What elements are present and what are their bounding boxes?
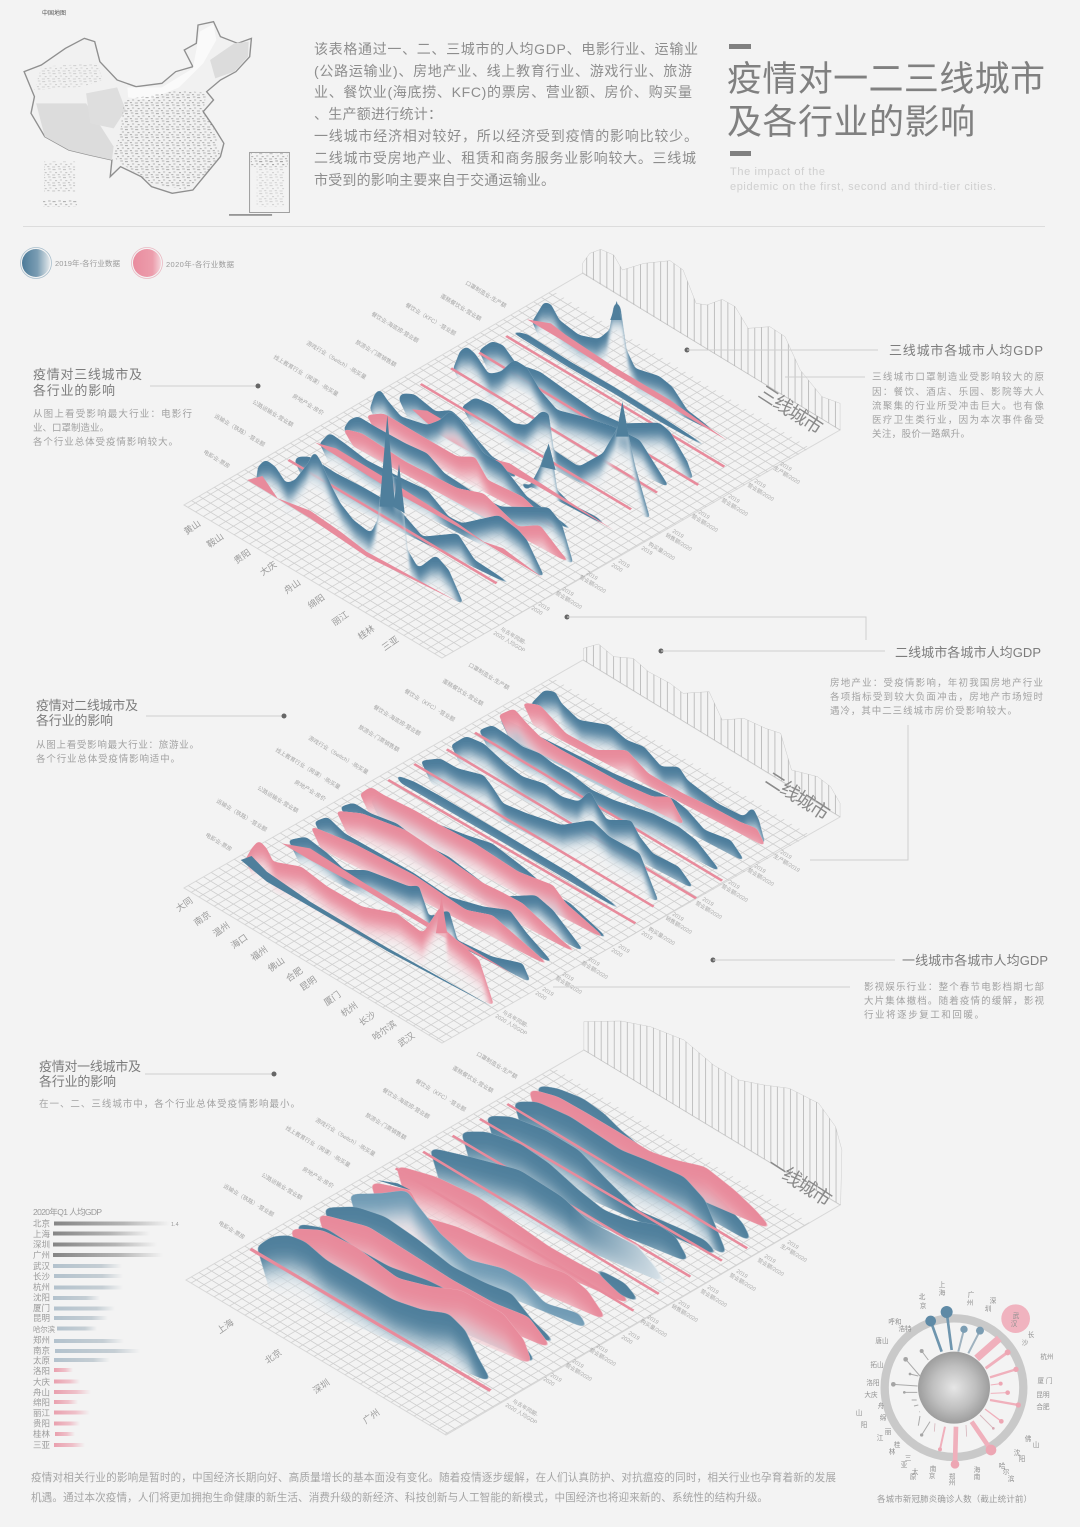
- city labels: 桂林: [355, 622, 377, 642]
- radial chart: confirmed cases by city: 合肥: [1036, 1402, 1050, 1411]
- radial chart: confirmed cases by city: 长: [1028, 1330, 1035, 1339]
- chart: first-tier cities: [186, 1021, 842, 1435]
- year labels: 2019: [617, 559, 630, 570]
- hatched wall: per-capita GDP: [582, 249, 840, 430]
- callout: first-tier right: [553, 953, 1048, 1021]
- year labels: 2020: [542, 1377, 555, 1388]
- city labels: 哈尔滨: [370, 1018, 398, 1042]
- callout: third-tier left: [33, 367, 260, 448]
- industry labels: 旅游业-门票销售额: [357, 723, 401, 754]
- radial chart: confirmed cases by city: 南: [930, 1464, 937, 1473]
- year labels: 与去年同期-: [499, 625, 528, 647]
- year labels: 2019: [537, 602, 550, 613]
- callout: third-tier right: 关注，股价一路飙升。: [872, 428, 970, 440]
- callout: second-tier left: [36, 698, 286, 765]
- radial chart: confirmed cases by city: 洛阳: [866, 1378, 880, 1387]
- year labels: 2019: [727, 880, 740, 891]
- year labels: 营业额/2020: [728, 1271, 757, 1293]
- year labels: 2019: [640, 931, 653, 942]
- year labels: [504, 1238, 811, 1426]
- callout: third-tier right: [684, 343, 1044, 440]
- industry labels: 餐饮业-海底捞-营业额: [372, 703, 423, 738]
- callout: second-tier right: 房地产业：受疫情影响，年初我国房地产行业: [830, 677, 1043, 689]
- radial chart: confirmed cases by city: 上: [939, 1280, 946, 1289]
- bar chart: 2020 Q1 per-capita GDP: 长沙: [33, 1272, 51, 1282]
- year labels: 营业额/2020: [746, 481, 775, 503]
- bar chart: 2020 Q1 per-capita GDP: 2020年Q1 人均GDP: [33, 1207, 102, 1217]
- industry labels: [204, 661, 511, 853]
- ridges: rear to front: [247, 300, 727, 605]
- radial chart: confirmed cases by city: 山: [1033, 1440, 1039, 1449]
- radial chart: confirmed cases by city: 阳: [1019, 1454, 1025, 1463]
- closing text: [31, 1471, 836, 1504]
- city labels: 上海: [214, 1316, 236, 1336]
- intro paragraph: 业、餐饮业(海底捞、KFC)的票房、营业额、房价、购买量: [314, 84, 692, 100]
- year labels: 2019: [585, 571, 598, 582]
- year labels: 营业额/2020: [564, 1361, 593, 1383]
- year labels: 营业额/2020: [746, 866, 775, 888]
- year labels: 2019: [735, 1269, 748, 1280]
- year labels: 2019: [786, 1240, 799, 1251]
- city labels: 深圳: [311, 1377, 332, 1396]
- year labels: 2020: [534, 991, 547, 1002]
- wall title: 三线城市: [754, 382, 827, 439]
- year labels: 营业额/2020: [554, 589, 583, 611]
- radial chart: confirmed cases by city: 尔: [1003, 1467, 1010, 1476]
- city labels: 大同: [173, 894, 195, 914]
- industry labels: 电影业-票房: [204, 831, 234, 853]
- bar chart: 2020 Q1 per-capita GDP: 武汉: [33, 1261, 51, 1271]
- year labels: 销售额/2020: [664, 914, 693, 936]
- year labels: 2019: [727, 494, 740, 505]
- radial chart: confirmed cases by city: 圳: [985, 1304, 992, 1313]
- callout: third-tier left: 各个行业总体受疫情影响较大。: [33, 436, 178, 448]
- industry labels: 游戏行业（Switch）-购买量: [314, 1116, 377, 1158]
- year labels: 2019: [753, 864, 766, 875]
- ridges: rear to front: [251, 1085, 775, 1391]
- callout: third-tier left: 各行业的影响: [33, 383, 115, 398]
- city labels: 丽江: [330, 609, 351, 628]
- callout: third-tier right: 三线城市口罩制造业受影响较大的原: [872, 371, 1044, 383]
- radial chart: confirmed cases by city: 三: [905, 1454, 912, 1462]
- year labels: 营业额/2020: [756, 1256, 785, 1278]
- radial chart: confirmed cases by city: 深: [990, 1296, 997, 1305]
- city labels: 绵阳: [305, 591, 327, 611]
- year labels: 营业额/2020: [699, 1287, 728, 1309]
- radial chart: confirmed cases by city: 唐山: [875, 1336, 889, 1345]
- radial chart: confirmed cases by city: 沙: [1022, 1339, 1029, 1347]
- bar chart: 2020 Q1 per-capita GDP: 1.4: [171, 1222, 179, 1228]
- industry labels: 房地产业-房价: [301, 1165, 336, 1190]
- callout: third-tier right: 三线城市各城市人均GDP: [889, 343, 1043, 358]
- radial chart: confirmed cases by city: 京: [929, 1471, 936, 1480]
- radial chart: confirmed cases by city: 佛: [1025, 1434, 1032, 1443]
- radial chart: confirmed cases by city: 海: [939, 1288, 946, 1297]
- city labels: 广州: [360, 1406, 382, 1426]
- intro paragraph: 市受到的影响主要来自于交通运输业。: [314, 172, 555, 188]
- bar chart: 2020 Q1 per-capita GDP: 杭州: [33, 1282, 50, 1292]
- legend: 2020年-各行业数据: [166, 259, 234, 269]
- year labels: 营业额/2020: [720, 496, 749, 518]
- bar chart: 2020 Q1 per-capita GDP: [33, 1207, 179, 1450]
- city labels: 武汉: [395, 1029, 417, 1049]
- city labels: [214, 1316, 382, 1426]
- industry labels: 线上教育行业（网课）-购买量: [274, 746, 342, 791]
- city labels: 黄山: [181, 517, 203, 537]
- title: epidemic on the first, second and third-tier cities.: [730, 181, 996, 193]
- year labels: 营业额/2020: [588, 1346, 617, 1368]
- radial chart: confirmed cases by city: 京: [920, 1301, 927, 1310]
- bar chart: 2020 Q1 per-capita GDP: 厦门: [33, 1303, 50, 1313]
- year labels: 2019: [595, 1344, 608, 1355]
- year labels: 营业额/2020: [578, 573, 607, 595]
- year labels: 2020 人均GDP: [494, 1012, 529, 1037]
- radial chart: confirmed cases by city: 州: [967, 1300, 973, 1307]
- city labels: 长沙: [356, 1008, 378, 1028]
- industry labels: 蛋糕餐饮业-营业额: [451, 1064, 495, 1095]
- industry labels: 游戏行业（Switch）-购买量: [307, 734, 370, 776]
- radial chart: confirmed cases by city: 各城市新冠肺炎确诊人数（截止统计前）: [877, 1494, 1032, 1504]
- year labels: 2019: [753, 479, 766, 490]
- radial chart: confirmed cases by city: 滨: [1008, 1474, 1015, 1483]
- radial chart: confirmed cases by city: 桂: [894, 1440, 901, 1449]
- city labels: 鞍山: [204, 530, 226, 550]
- radial chart: confirmed cases by city: 拓山: [870, 1360, 884, 1369]
- industry labels: 餐饮业-海底捞-营业额: [370, 310, 421, 345]
- year labels: 购买量/2020: [647, 540, 677, 562]
- callout: second-tier left: 从图上看受影响最大行业：旅游业。: [36, 739, 199, 751]
- industry labels: 餐饮业（KFC）-营业额: [414, 1077, 468, 1114]
- radial chart: confirmed cases by city: 丽: [885, 1428, 892, 1436]
- radial chart: confirmed cases by city: 亚: [901, 1461, 908, 1469]
- year labels: 2019: [706, 1285, 719, 1296]
- radial chart: confirmed cases by city: 郑: [949, 1473, 956, 1481]
- year labels: 2019: [697, 510, 710, 521]
- year labels: 2019: [571, 1359, 584, 1370]
- bar chart: 2020 Q1 per-capita GDP: 桂林: [33, 1429, 51, 1439]
- wall title: 一线城市: [763, 1154, 836, 1211]
- closing text: 机遇。通过本次疫情，人们将更加拥抱生命健康的新生活、消费升级的新经济、科技创新与人工智能的新模式，中国经济也将迎来新的、系统性的结构升级。: [31, 1491, 768, 1504]
- industry labels: [202, 279, 508, 470]
- intro paragraph: (公路运输业)、房地产业、线上教育行业、游戏行业、旅游: [314, 63, 692, 79]
- radial chart: confirmed cases by city: 州: [949, 1480, 955, 1487]
- bar chart: 2020 Q1 per-capita GDP: 沈阳: [33, 1292, 50, 1302]
- intro paragraph: [314, 41, 698, 188]
- callout: third-tier left: 业、口罩制造业。: [33, 422, 109, 434]
- radial chart: confirmed cases by city: 江: [877, 1434, 884, 1442]
- radial chart: confirmed cases by city: 绵: [880, 1413, 887, 1422]
- year labels: 2019: [627, 1331, 640, 1342]
- year labels: 2020 人均GDP: [492, 629, 527, 654]
- city labels: 南京: [191, 908, 213, 928]
- callout: third-tier right: 因：餐饮、酒店、乐园、影院等大人: [872, 386, 1044, 398]
- year labels: 营业额/2020: [694, 899, 723, 921]
- year labels: 2019: [646, 1315, 659, 1326]
- callout: third-tier left: 疫情对三线城市及: [33, 367, 142, 382]
- year labels: 2019: [779, 850, 792, 861]
- industry labels: 餐饮业（KFC）-营业额: [404, 301, 458, 338]
- year labels: 生产额/2020: [779, 1242, 808, 1264]
- city labels: 厦门: [321, 988, 343, 1008]
- bar chart: 2020 Q1 per-capita GDP: 太原: [33, 1356, 50, 1366]
- callout: second-tier left: 各个行业总体受疫情影响适中。: [36, 753, 180, 765]
- industry labels: 公路运输业-营业额: [256, 784, 300, 815]
- industry labels: 蛋糕餐饮业-营业额: [441, 677, 485, 708]
- year labels: 2020: [530, 606, 543, 617]
- year labels: 2019: [763, 1254, 776, 1265]
- city labels: 福州: [248, 943, 270, 963]
- bar chart: 2020 Q1 per-capita GDP: 深圳: [33, 1240, 50, 1250]
- city labels: [181, 517, 401, 653]
- year labels: 2019: [671, 529, 684, 540]
- industry labels: 线上教育行业（网课）-购买量: [284, 1124, 352, 1169]
- callout: second-tier left: 疫情对二线城市及: [36, 698, 138, 713]
- radial chart: confirmed cases by city: 舟: [878, 1401, 885, 1410]
- bar chart: 2020 Q1 per-capita GDP: 南京: [33, 1346, 50, 1356]
- industry labels: 蛋糕餐饮业-营业额: [439, 292, 483, 323]
- city labels: 杭州: [338, 999, 360, 1019]
- industry labels: 房地产业-房价: [291, 392, 326, 417]
- intro paragraph: 二线城市受房地产业、租赁和商务服务业影响较大。三线城: [314, 150, 696, 166]
- callout: second-tier right: 遇冷，其中二三线城市房价受影响较大。: [830, 705, 1017, 717]
- hatched wall: per-capita GDP: [584, 1021, 842, 1205]
- city labels: 三亚: [380, 634, 401, 653]
- bar chart: 2020 Q1 per-capita GDP: 上海: [33, 1229, 51, 1239]
- callout: first-tier left: 在一、二、三线城市中，各个行业总体受疫情影响最小。: [39, 1098, 300, 1110]
- year labels: 2019: [677, 1300, 690, 1311]
- industry labels: 游戏行业（Switch）-购买量: [305, 339, 368, 381]
- callout: second-tier right: [564, 614, 1043, 860]
- grid floor: [186, 1050, 840, 1435]
- city labels: 温州: [211, 920, 232, 939]
- radial chart: confirmed cases by city: 沈: [1014, 1448, 1021, 1457]
- intro paragraph: 一线城市经济相对较好，所以经济受到疫情的影响比较少。: [314, 128, 698, 144]
- bar chart: 2020 Q1 per-capita GDP: 郑州: [33, 1335, 50, 1345]
- radial chart: confirmed cases by city: 浩特: [898, 1324, 912, 1333]
- bar chart: 2020 Q1 per-capita GDP: 舟山: [33, 1388, 50, 1398]
- bar chart: 2020 Q1 per-capita GDP: 洛阳: [33, 1366, 50, 1376]
- radial chart: confirmed cases by city: 山: [856, 1408, 862, 1417]
- radial chart: confirmed cases by city: 杭州: [1040, 1352, 1054, 1361]
- year labels: 2019: [549, 1373, 562, 1384]
- bar chart: 2020 Q1 per-capita GDP: 大庆: [33, 1377, 51, 1387]
- radial chart: confirmed cases by city: 原: [910, 1473, 917, 1481]
- year labels: 2019: [671, 912, 684, 923]
- radial chart: confirmed cases by city: 哈: [999, 1461, 1006, 1470]
- radial chart: confirmed cases by city: 南: [974, 1472, 981, 1481]
- callout: first-tier right: 影视娱乐行业：整个春节电影档期七部: [864, 981, 1044, 993]
- year labels: 营业额/2020: [690, 512, 719, 534]
- year labels: 2019: [561, 972, 574, 983]
- year labels: 2019: [701, 897, 714, 908]
- year labels: 购买量/2020: [639, 1317, 668, 1339]
- radial chart: confirmed cases by city: 武: [1013, 1311, 1020, 1320]
- year labels: 2019: [640, 546, 653, 557]
- callout: third-tier left: 从图上看受影响最大行业：电影行: [33, 408, 192, 420]
- radial chart: confirmed cases by city: 汉: [1011, 1320, 1018, 1328]
- year labels: [492, 460, 804, 654]
- industry labels: 运输业（铁路）-营业额: [213, 412, 267, 449]
- industry labels: 公路运输业-营业额: [251, 398, 295, 429]
- industry labels: 线上教育行业（网课）-购买量: [272, 353, 340, 398]
- legend: [20, 248, 234, 278]
- bar chart: 2020 Q1 per-capita GDP: 广州: [33, 1250, 50, 1260]
- year labels: 2020: [620, 1335, 633, 1346]
- city labels: 贵阳: [231, 546, 253, 566]
- chart: second-tier cities: [173, 644, 840, 1049]
- chart: third-tier cities: [181, 249, 840, 658]
- title: [727, 44, 1045, 193]
- year labels: 购买量/2020: [647, 925, 677, 947]
- year labels: 2020: [610, 563, 623, 574]
- industry labels: 餐饮业（KFC）-营业额: [403, 687, 457, 724]
- city labels: 昆明: [298, 974, 319, 993]
- radial chart: confirmed cases by city: 北: [919, 1293, 926, 1301]
- industry labels: 旅游业-门票销售额: [354, 338, 398, 369]
- city labels: 大庆: [257, 558, 279, 578]
- year labels: 销售额/2020: [664, 531, 693, 553]
- year labels: 与去年同期-: [501, 1008, 530, 1030]
- industry labels: 餐饮业-海底捞-营业额: [381, 1086, 432, 1121]
- industry labels: 电影业-票房: [202, 448, 232, 470]
- year labels: 生产额/2019: [772, 852, 801, 874]
- industry labels: 口罩制造业-生产额: [475, 1050, 519, 1081]
- callout: first-tier right: 一线城市各城市人均GDP: [902, 953, 1048, 968]
- title: 及各行业的影响: [727, 103, 975, 142]
- bar chart: 2020 Q1 per-capita GDP: 哈尔滨: [33, 1324, 56, 1334]
- radial chart: confirmed cases by city: 阳: [861, 1420, 867, 1429]
- industry labels: 房地产业-房价: [293, 778, 328, 803]
- year labels: 营业额/2020: [720, 882, 749, 904]
- callout: second-tier right: 各项指标受到较大负面冲击，房地产市场短时: [830, 691, 1043, 703]
- callout: third-tier right: 医疗卫生类行业，因为本次事件备受: [872, 414, 1044, 426]
- radial chart: confirmed cases by city: 广: [968, 1290, 975, 1299]
- bar chart: 2020 Q1 per-capita GDP: 三亚: [33, 1440, 51, 1450]
- year labels: 2019: [561, 587, 574, 598]
- radial chart: confirmed cases by city: 林: [889, 1447, 896, 1456]
- callout: first-tier left: 各行业的影响: [39, 1074, 116, 1089]
- bar chart: 2020 Q1 per-capita GDP: 昆明: [33, 1313, 50, 1323]
- legend: 2019年-各行业数据: [55, 258, 120, 268]
- year labels: 营业额/2020: [554, 974, 583, 996]
- map of China: 中国地图: [42, 9, 66, 17]
- year labels: 销售额/2020: [670, 1302, 699, 1324]
- callout: second-tier left: 各行业的影响: [36, 713, 113, 728]
- city labels: 海口: [228, 931, 250, 951]
- year labels: 2020: [610, 948, 623, 959]
- callout: first-tier right: 大片集体撤档。随着疫情的缓解，影视: [864, 995, 1044, 1007]
- callout: first-tier left: 疫情对一线城市及: [39, 1059, 141, 1074]
- year labels: 2020 人均GDP: [504, 1401, 539, 1426]
- year labels: 2019: [541, 987, 554, 998]
- callout: first-tier left: [39, 1059, 300, 1110]
- callout: second-tier right: 二线城市各城市人均GDP: [895, 645, 1041, 660]
- map of China: [24, 9, 289, 215]
- intro paragraph: 、生产额进行统计：: [314, 106, 442, 122]
- ridges: rear to front: [241, 690, 766, 1007]
- industry labels: 运输业（铁路）-营业额: [222, 1182, 276, 1219]
- radial chart: confirmed cases by city: [856, 1280, 1054, 1504]
- city labels: 北京: [262, 1346, 284, 1366]
- year labels: 2019: [779, 462, 792, 473]
- year labels: 2019: [587, 957, 600, 968]
- industry labels: 公路运输业-营业额: [260, 1171, 304, 1202]
- callout: third-tier right: 流聚集的行业所受冲击巨大。也有像: [872, 400, 1044, 412]
- year labels: 营业额/2020: [580, 959, 609, 981]
- wall title: 二线城市: [761, 768, 834, 825]
- bar chart: 2020 Q1 per-capita GDP: 北京: [33, 1218, 50, 1228]
- year labels: 2019: [617, 944, 630, 955]
- closing text: 疫情对相关行业的影响是暂时的，中国经济长期向好、高质量增长的基本面没有变化。随着疫情逐步缓解，在人们认真防护、对抗瘟疫的同时，相关行业也孕育着新的发展: [31, 1471, 836, 1484]
- city labels: 合肥: [283, 964, 305, 984]
- hatched wall: per-capita GDP: [583, 644, 840, 817]
- industry labels: 口罩制造业-生产额: [467, 661, 511, 692]
- radial chart: confirmed cases by city: 厦 门: [1037, 1376, 1053, 1385]
- radial chart: confirmed cases by city: 太: [912, 1467, 919, 1476]
- radial chart: confirmed cases by city: 大庆: [864, 1390, 878, 1399]
- radial chart: confirmed cases by city: 呼和: [888, 1317, 902, 1326]
- title: The impact of the: [730, 166, 825, 178]
- industry labels: [217, 1050, 519, 1241]
- radial chart: confirmed cases by city: 昆明: [1036, 1391, 1050, 1399]
- city labels: 舟山: [281, 576, 303, 596]
- intro paragraph: 该表格通过一、二、三城市的人均GDP、电影行业、运输业: [314, 41, 698, 57]
- callout: first-tier right: 行业将逐步复工和回暖。: [864, 1009, 984, 1021]
- industry labels: 运输业（铁路）-营业额: [215, 797, 269, 834]
- bar chart: 2020 Q1 per-capita GDP: 贵阳: [33, 1418, 50, 1428]
- bar chart: 2020 Q1 per-capita GDP: 绵阳: [33, 1398, 50, 1408]
- radial chart: confirmed cases by city: 海: [974, 1465, 981, 1474]
- year labels: 生产额/2020: [772, 464, 801, 486]
- year labels: [494, 848, 804, 1037]
- city labels: [173, 894, 417, 1049]
- industry labels: 口罩制造业-生产额: [464, 279, 508, 310]
- title: 疫情对一二三线城市: [727, 60, 1045, 99]
- industry labels: 电影业-票房: [217, 1219, 247, 1241]
- year labels: 与去年同期-: [511, 1397, 540, 1419]
- city labels: 佛山: [265, 954, 287, 974]
- grid floor: [184, 660, 840, 1043]
- grid floor: [184, 273, 840, 658]
- industry labels: 旅游业-门票销售额: [364, 1111, 408, 1142]
- bar chart: 2020 Q1 per-capita GDP: 丽江: [33, 1408, 51, 1418]
